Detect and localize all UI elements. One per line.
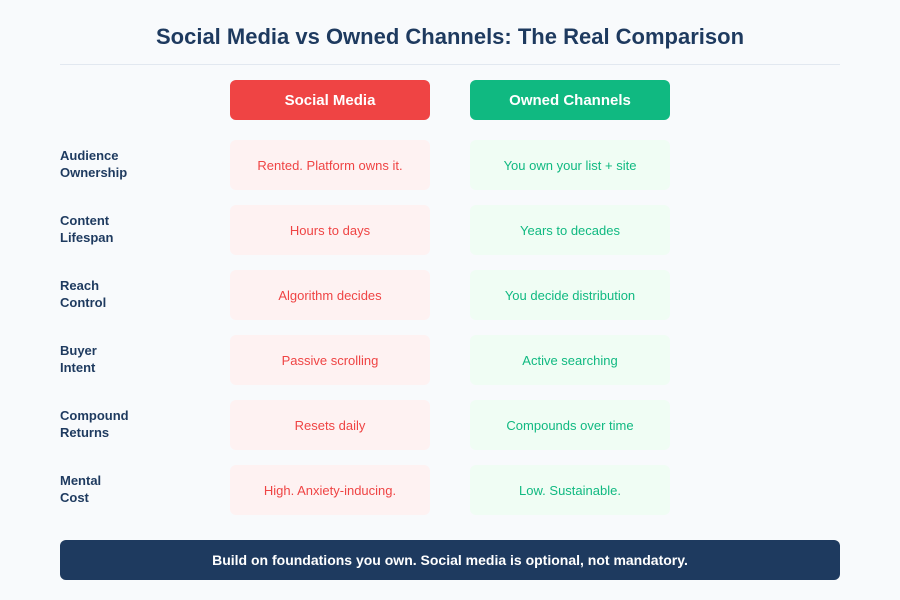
row label: reach control: Control — [60, 295, 106, 310]
cell: owned reach — [470, 270, 670, 320]
cell: owned lifespan — [470, 205, 670, 255]
row label: content lifespan: Content — [60, 213, 109, 228]
row label: audience ownership: Audience — [60, 148, 119, 163]
header: owned channels — [470, 80, 670, 120]
cell: social cost: High. Anxiety-inducing. — [264, 482, 396, 498]
cell: social audience: Rented. Platform owns it. — [257, 158, 403, 172]
cell: owned audience: You own your list + site — [504, 158, 636, 172]
cell: social lifespan — [230, 205, 430, 255]
cell: owned returns — [470, 400, 670, 450]
row label: compound returns: Returns — [60, 425, 109, 440]
cell: owned cost — [470, 465, 670, 515]
row label: mental cost — [60, 473, 101, 505]
header: social media: Social Media — [285, 92, 375, 108]
row label: content lifespan: Lifespan — [60, 230, 113, 245]
cell: owned returns: Compounds over time — [506, 418, 634, 432]
row label: compound returns: Compound — [60, 408, 129, 423]
cell: owned cost: Low. Sustainable. — [519, 482, 621, 498]
footer banner — [60, 540, 840, 580]
row label: reach control: Reach — [60, 278, 99, 293]
cell: owned intent: Active searching — [522, 352, 618, 368]
cell: social returns — [230, 400, 430, 450]
row label: audience ownership: Ownership — [60, 165, 127, 180]
cell: owned intent — [470, 335, 670, 385]
cell: social reach: Algorithm decides — [278, 288, 382, 302]
row label: buyer intent: Buyer — [60, 343, 97, 358]
header: owned channels: Owned Channels — [509, 92, 631, 108]
footer banner: Build on foundations you own. Social media is optional, not mandatory. — [212, 552, 688, 568]
title: Social Media vs Owned Channels: The Real Comparison — [156, 24, 744, 49]
row label: reach control — [60, 278, 106, 310]
row label: compound returns — [60, 408, 129, 440]
cell: social cost — [230, 465, 430, 515]
header: social media — [230, 80, 430, 120]
cell: social intent: Passive scrolling — [282, 352, 378, 368]
row label: buyer intent: Intent — [60, 360, 95, 375]
row label: buyer intent — [60, 343, 97, 375]
cell: owned lifespan: Years to decades — [520, 222, 620, 238]
row label: audience ownership — [60, 148, 127, 180]
cell: social lifespan: Hours to days — [290, 222, 370, 238]
cell: owned reach: You decide distribution — [505, 288, 635, 302]
cell: social reach — [230, 270, 430, 320]
row label: mental cost: Cost — [60, 490, 89, 505]
cell: social intent — [230, 335, 430, 385]
row label: mental cost: Mental — [60, 473, 101, 488]
row label: content lifespan — [60, 213, 113, 245]
cell: owned audience — [470, 140, 670, 190]
cell: social returns: Resets daily — [295, 418, 365, 432]
cell: social audience — [230, 140, 430, 190]
